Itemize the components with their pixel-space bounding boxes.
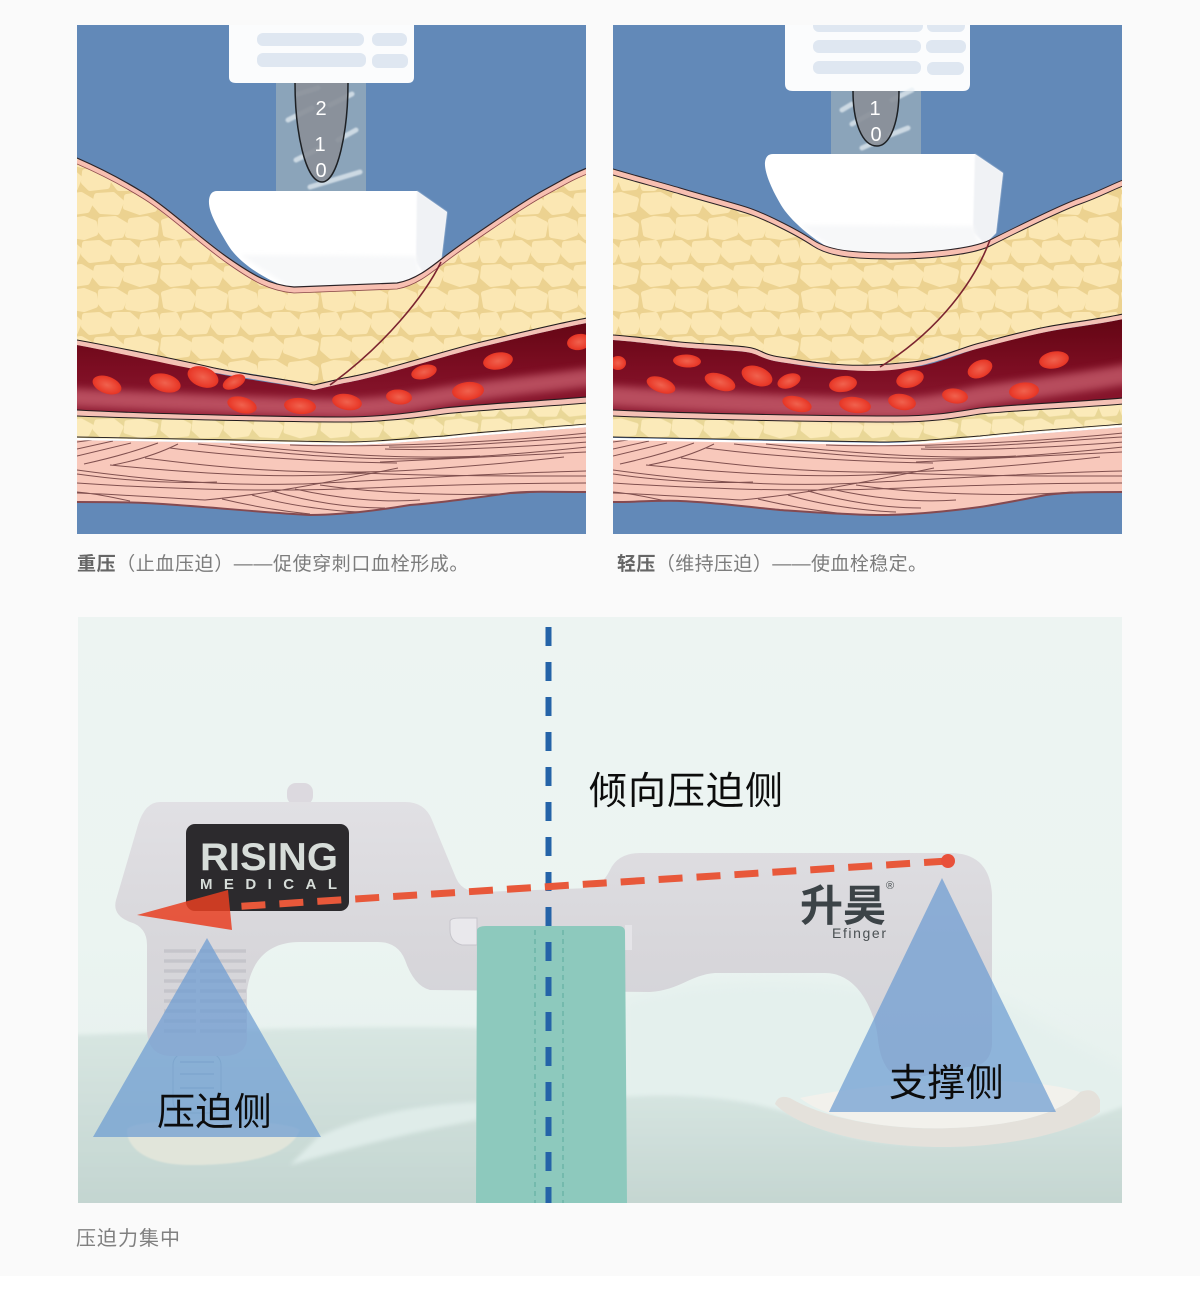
velcro strap xyxy=(476,926,627,1203)
caption: light compression: 轻压（维持压迫）——使血栓稳定。 xyxy=(617,553,927,575)
arm background xyxy=(50,981,1160,1240)
lower fat layer xyxy=(613,402,1123,442)
lower fat layer xyxy=(77,401,587,443)
triangle: compression side xyxy=(93,938,321,1137)
panel: heavy compression diagram xyxy=(60,25,600,534)
skin layer xyxy=(613,169,1123,259)
blood vessel xyxy=(60,318,600,422)
transparent screw column with pressure scale: 0 xyxy=(315,160,327,182)
compression device upper housing xyxy=(785,18,970,91)
compression device body xyxy=(115,783,992,1080)
label: support side: 支撑侧 xyxy=(889,1063,1004,1105)
upper fat layer xyxy=(77,158,587,385)
logo: 升昊 Efinger: ® xyxy=(886,880,894,892)
red blood cells xyxy=(90,332,592,417)
caption: heavy compression: 重压（止血压迫）——促使穿刺口血栓形成。 xyxy=(77,553,469,575)
panel: light compression diagram xyxy=(596,18,1140,534)
transparent screw column with pressure scale xyxy=(831,90,921,154)
silicone base pad xyxy=(775,1081,1100,1147)
muscle layer xyxy=(77,424,587,515)
transparent screw column with pressure scale xyxy=(276,83,366,191)
center axis dashed line xyxy=(546,627,552,1203)
transparent screw column with pressure scale: 1 xyxy=(869,98,881,120)
clear dial under handle xyxy=(173,1053,221,1113)
logo: RISING MEDICAL: RISING xyxy=(200,836,338,879)
blood vessel xyxy=(596,314,1140,422)
transparent screw column with pressure scale: 1 xyxy=(314,134,326,156)
puncture track xyxy=(880,240,990,367)
triangle: support side xyxy=(829,878,1056,1112)
force direction dashed arrow xyxy=(137,854,955,930)
skin layer xyxy=(77,158,587,293)
caption: concentrated force: 压迫力集中 xyxy=(76,1227,181,1250)
label: tilt toward compression side: 倾向压迫侧 xyxy=(589,771,784,813)
white compression pad xyxy=(765,154,1003,254)
logo: 升昊 Efinger: 升昊 xyxy=(800,883,886,931)
transparent screw column with pressure scale: 0 xyxy=(870,124,882,146)
logo: 升昊 Efinger: Efinger xyxy=(832,925,886,941)
red blood cells xyxy=(610,349,1070,415)
upper fat layer xyxy=(613,169,1123,366)
muscle layer xyxy=(613,424,1123,515)
logo: RISING MEDICAL: MEDICAL xyxy=(200,876,337,893)
label: compression side: 压迫侧 xyxy=(157,1092,272,1134)
compression device upper housing xyxy=(229,25,414,83)
panel: device photo xyxy=(78,617,1122,1203)
white compression pad xyxy=(209,191,447,290)
puncture track xyxy=(330,262,441,385)
logo: RISING MEDICAL xyxy=(186,824,349,911)
transparent screw column with pressure scale: 2 xyxy=(315,98,327,120)
